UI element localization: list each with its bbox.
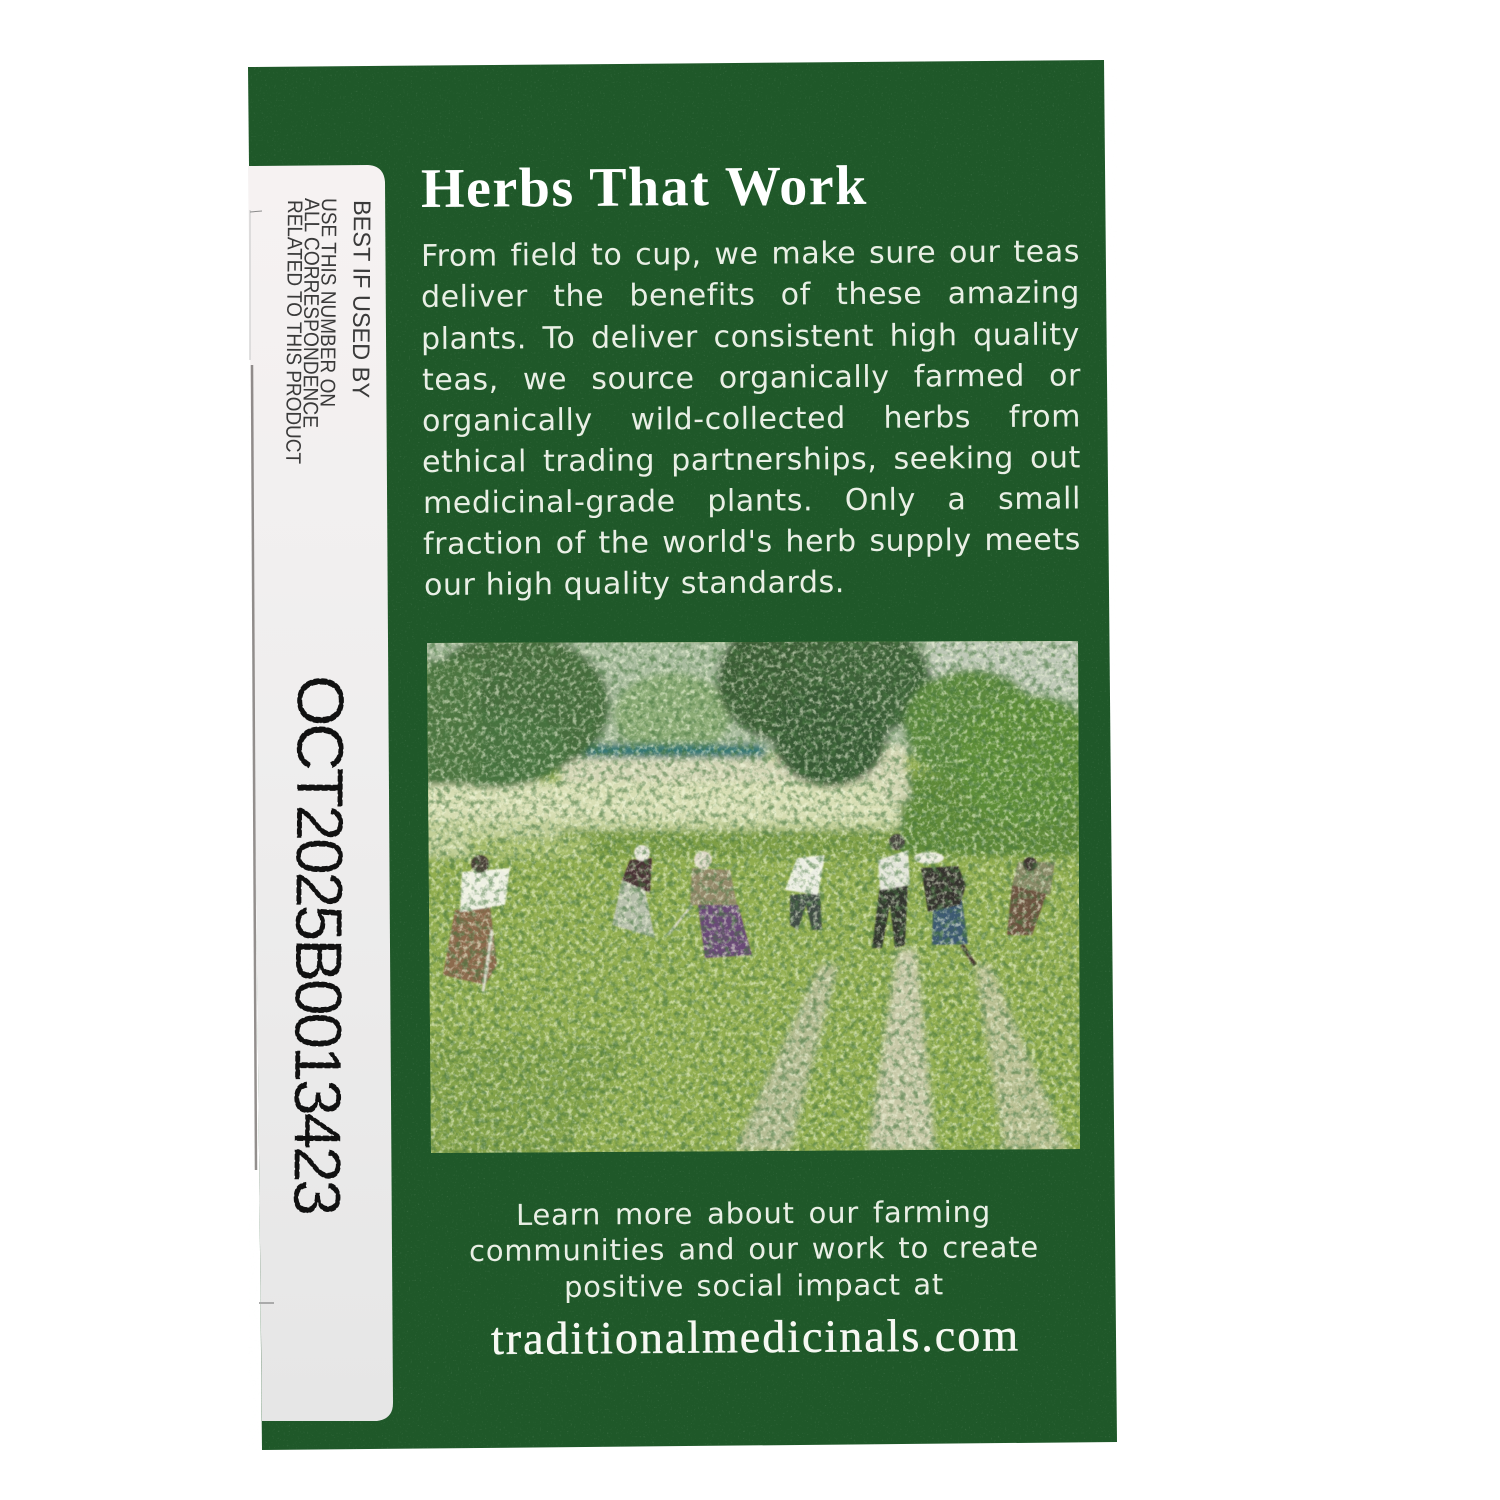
worker 7 <box>1007 857 1055 935</box>
centre tree <box>713 642 826 744</box>
body text block <box>421 234 1081 603</box>
lot number instructions: ALL CORRESPONDENCE <box>298 198 323 428</box>
worker 5 <box>872 834 910 948</box>
photo: workers hoeing an herb field <box>427 641 1080 1153</box>
body text block: fraction of the world's herb supply meets <box>423 522 1081 562</box>
website address: traditionalmedicinals.com <box>491 1309 1020 1364</box>
field paths <box>735 965 838 1150</box>
body text block: our high quality standards. <box>424 565 845 603</box>
distant hills <box>420 635 1090 755</box>
worker 4 <box>785 855 825 930</box>
body text block: organically wild-collected herbs from <box>422 399 1081 439</box>
heading: Herbs That Work <box>421 155 868 220</box>
worker 1 <box>443 855 510 992</box>
body text block: plants. To deliver consistent high quality <box>421 317 1080 357</box>
field <box>420 857 1090 1157</box>
worker 2 <box>612 845 655 938</box>
pale bush band <box>428 816 906 862</box>
closing message: communities and our work to create <box>469 1230 1039 1268</box>
lot number instructions: RELATED TO THIS PRODUCT <box>281 200 306 464</box>
best-by caption: BEST IF USED BY <box>347 200 375 398</box>
worker 3 <box>668 851 752 958</box>
closing message: Learn more about our farming <box>516 1195 991 1232</box>
printed date and lot code: OCT2025B0013423 <box>280 675 358 1216</box>
lot number instructions: USE THIS NUMBER ON <box>316 198 340 407</box>
body text block: teas, we source organically farmed or <box>422 358 1081 398</box>
body text block: deliver the benefits of these amazing <box>421 275 1080 315</box>
workers <box>443 834 1055 992</box>
worker 6 <box>914 852 975 965</box>
left tree <box>440 642 614 770</box>
right trees <box>904 669 1040 781</box>
body text block: medicinal-grade plants. Only a small <box>423 481 1081 521</box>
body text block: ethical trading partnerships, seeking out <box>422 440 1081 480</box>
closing message: positive social impact at <box>564 1267 944 1304</box>
body text block: From field to cup, we make sure our teas <box>421 234 1080 274</box>
lot number instructions <box>281 198 340 464</box>
